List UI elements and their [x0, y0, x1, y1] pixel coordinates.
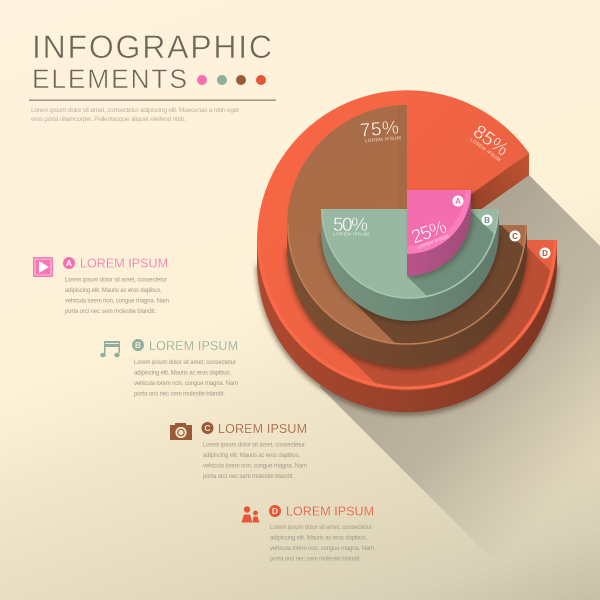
legend B: [100, 339, 238, 398]
heading A: LOREM IPSUM: [80, 256, 168, 270]
chart badges: B: [484, 216, 490, 225]
body B: [134, 360, 238, 398]
legend C: [170, 422, 307, 480]
label 85%: 85%: [469, 121, 512, 161]
chart badges: D: [542, 249, 548, 258]
chart badges: A: [455, 197, 461, 206]
icon: camera: [170, 423, 192, 440]
slice C: brown 75%: [283, 105, 530, 372]
body C: adipiscing elit. Mauris ac eros dapibus,: [203, 453, 300, 459]
long diagonal shadow: [320, 175, 600, 600]
body A: vehicula lorem non, congue magna. Nam: [65, 298, 169, 304]
body C: vehicula lorem non, congue magna. Nam: [203, 464, 307, 470]
heading D: LOREM IPSUM: [286, 504, 374, 518]
badge A: A: [66, 258, 72, 268]
label 50%: LOREM IPSUM: [333, 232, 369, 236]
icon: music: [100, 341, 120, 357]
badge B: B: [135, 340, 141, 350]
body D: adipiscing elit. Mauris ac eros dapibus,: [270, 536, 367, 542]
badge D: D: [272, 506, 278, 516]
percent labels: [333, 117, 512, 250]
body B: vehicula lorem non, congue magna. Nam: [134, 381, 238, 387]
body B: porta orci nec sem molestie blandit.: [134, 392, 225, 398]
title colour dots: [197, 75, 266, 85]
body D: porta orci nec sem molestie blandit.: [270, 556, 361, 562]
body B: Lorem ipsum dolor sit amet, consectetur: [134, 360, 236, 366]
body D: vehicula lorem non, congue magna. Nam: [270, 546, 374, 552]
label 75%: 75%: [359, 117, 400, 142]
chart badges: [452, 196, 550, 258]
slice B: teal 50%: [318, 209, 501, 324]
body A: [65, 278, 169, 315]
intro text: [31, 107, 239, 123]
heading B: LOREM IPSUM: [149, 339, 238, 353]
body D: Lorem ipsum dolor sit amet, consectetur: [270, 525, 372, 531]
icon: play: [33, 257, 53, 277]
heading C: LOREM IPSUM: [218, 422, 307, 436]
label 25%: 25%: [409, 216, 450, 248]
intro text: eros porta ullamcorper. Pellentesque aliquet eleifend nibh.: [31, 116, 186, 123]
chart badges: C: [512, 232, 518, 241]
badge C: C: [204, 423, 211, 433]
label 25%: LOREM IPSUM: [417, 234, 450, 250]
label 50%: 50%: [333, 215, 368, 236]
body A: Lorem ipsum dolor sit amet, consectetur: [65, 278, 167, 284]
title: [32, 29, 272, 94]
intro text: Lorem ipsum dolor sit amet, consectetur adipiscing elit. Maecenas a nibh eget: [31, 107, 239, 114]
body C: [203, 442, 307, 480]
slice D: red 85%: [253, 90, 560, 418]
label 75%: LOREM IPSUM: [365, 135, 401, 143]
body A: porta orci nec sem molestie blandit.: [65, 309, 156, 315]
body C: porta orci nec sem molestie blandit.: [203, 474, 294, 480]
body D: [270, 525, 374, 562]
label 85%: LOREM IPSUM: [469, 137, 502, 162]
icon: people: [242, 506, 260, 522]
body B: adipiscing elit. Mauris ac eros dapibus,: [134, 370, 231, 376]
title: INFOGRAPHIC: [32, 29, 272, 65]
slice A: pink 25%: [407, 190, 474, 278]
body C: Lorem ipsum dolor sit amet, consectetur: [203, 442, 305, 448]
legend D: [242, 504, 374, 562]
title: ELEMENTS: [32, 64, 187, 94]
body A: adipiscing elit. Mauris ac eros dapibus,: [65, 288, 162, 294]
legend A: [33, 256, 169, 315]
pie chart: [253, 90, 560, 418]
